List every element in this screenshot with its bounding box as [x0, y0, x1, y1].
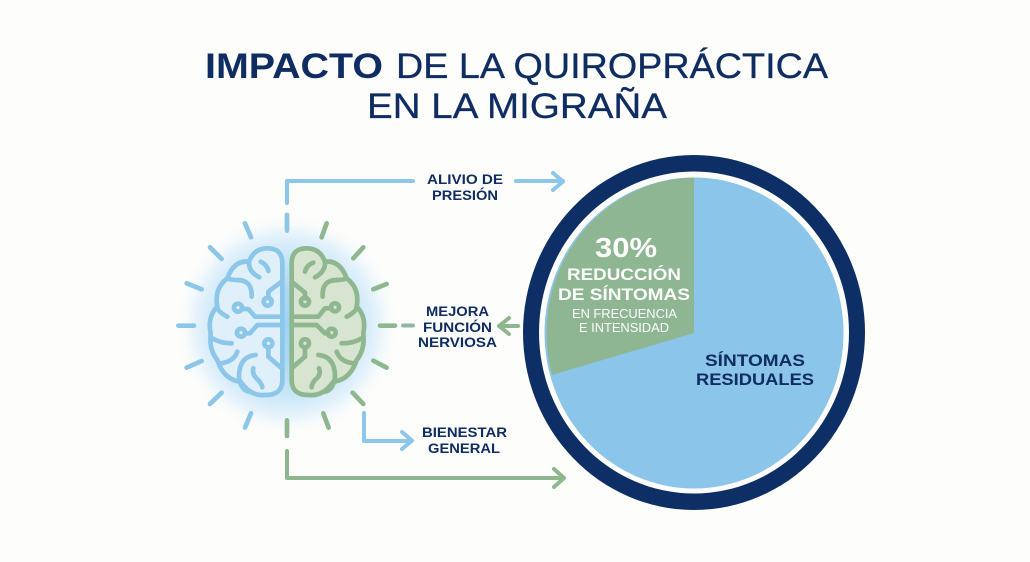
- slice text: 30% reducción: DE SÍNTOMAS: [558, 285, 690, 304]
- slice text: 30% reducción: 30%: [595, 232, 657, 263]
- brain: right green hemisphere: [292, 248, 364, 395]
- label: mejora función nerviosa: FUNCIÓN: [423, 320, 492, 335]
- brain: left blue hemisphere: [210, 248, 282, 395]
- label: alivio de presión: ALIVIO DE: [427, 172, 503, 187]
- arrow: green lower connector: [287, 420, 564, 487]
- label: alivio de presión: [427, 172, 503, 203]
- title: DE LA QUIROPRÁCTICA: [396, 47, 829, 86]
- slice text: 30% reducción: EN FRECUENCIA: [572, 307, 678, 321]
- label: mejora función nerviosa: [418, 304, 497, 350]
- slice text: síntomas residuales: [696, 351, 814, 389]
- label: bienestar general: GENERAL: [428, 441, 500, 456]
- pie slice: 30% reduction: [546, 178, 694, 375]
- slice text: síntomas residuales: SÍNTOMAS: [705, 351, 805, 370]
- arrow: bienestar general: [364, 413, 412, 449]
- brain rays: [178, 215, 395, 436]
- slice text: 30% reducción: E INTENSIDAD: [579, 321, 669, 335]
- title: EN LA MIGRAÑA: [367, 87, 668, 126]
- pie slice: residual symptoms: [544, 178, 844, 488]
- title: [205, 47, 829, 126]
- label: alivio de presión: PRESIÓN: [432, 188, 498, 203]
- label: bienestar general: [422, 425, 507, 456]
- slice text: síntomas residuales: RESIDUALES: [696, 371, 814, 389]
- pie outer ring: [523, 155, 865, 510]
- arrow: alivio de presión: [287, 173, 563, 231]
- icon: glowing brain: [175, 213, 399, 437]
- label: mejora función nerviosa: MEJORA: [426, 304, 489, 319]
- label: bienestar general: BIENESTAR: [422, 425, 507, 440]
- slice text: 30% reducción: REDUCCIÓN: [567, 265, 681, 284]
- pie inner white gap: [539, 172, 849, 494]
- arrow: mejora función nerviosa: [380, 318, 518, 334]
- title: IMPACTO: [205, 47, 383, 86]
- pie chart: [523, 155, 865, 510]
- label: mejora función nerviosa: NERVIOSA: [418, 335, 497, 350]
- slice text: 30% reducción: [558, 232, 690, 335]
